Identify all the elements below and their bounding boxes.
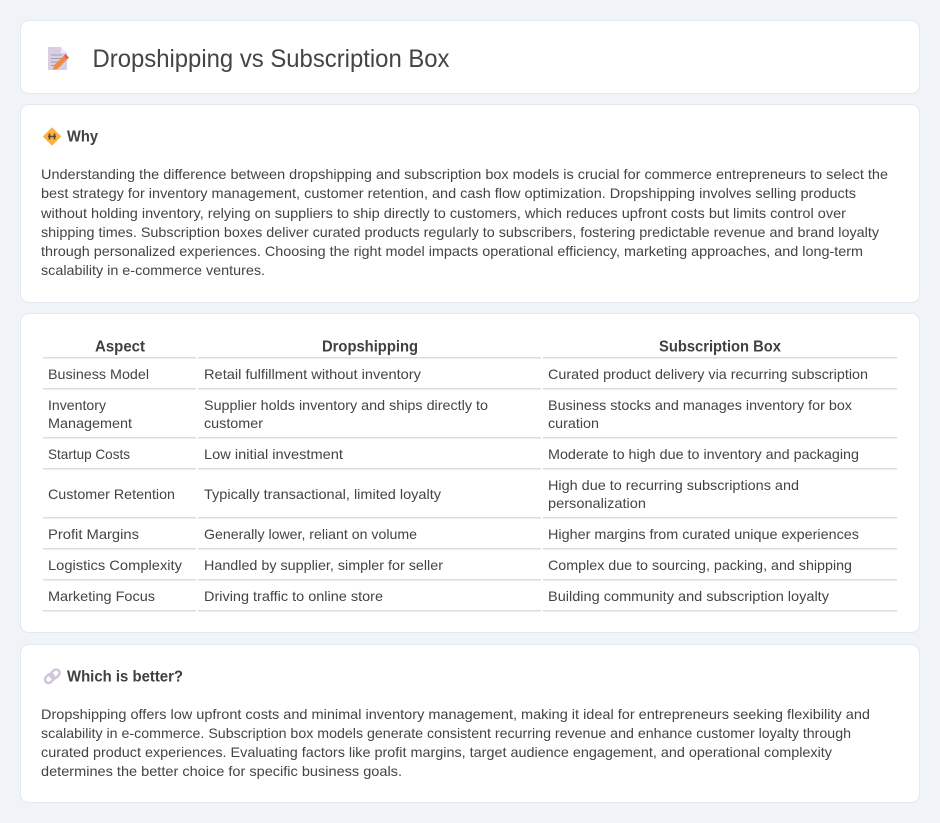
table header row: Aspect <box>95 338 146 356</box>
panel: comparison table <box>20 314 920 632</box>
table row: logistics complexity: Handled by supplier, simpler for seller <box>204 557 443 573</box>
table row: inventory management: Supplier holds inventory and ships directly to <box>204 397 488 413</box>
text block: why paragraph: Understanding the difference between dropshipping and subscription box models is crucial for commerce entrepreneurs to select the <box>41 166 888 182</box>
table row: startup costs: Low initial investment <box>204 446 343 462</box>
table header row: Subscription Box <box>659 338 781 356</box>
table row: marketing focus: Marketing Focus <box>48 588 155 604</box>
table header row: Dropshipping <box>322 338 418 356</box>
table row: profit margins <box>43 526 897 550</box>
table row: inventory management: Business stocks and manages inventory for box <box>548 397 852 413</box>
table row: startup costs: Startup Costs <box>48 446 130 462</box>
table row: inventory management: curation <box>548 415 599 431</box>
text block: why paragraph: shipping times. Subscription boxes deliver curated products regularly to subscribers, fostering predictable revenue and brand loyalty <box>41 224 879 240</box>
title: Dropshipping vs Subscription Box <box>92 45 450 73</box>
panel: why <box>20 104 920 302</box>
text block: which is better paragraph <box>41 706 870 779</box>
table row: customer retention: Typically transactional, limited loyalty <box>204 486 441 502</box>
table row: inventory management <box>43 397 897 438</box>
table row: business model <box>43 366 897 390</box>
table row: customer retention: High due to recurring subscriptions and <box>548 477 799 493</box>
table row: logistics complexity: Complex due to sourcing, packing, and shipping <box>548 557 852 573</box>
text block: which is better paragraph: determines the better choice for specific business goals. <box>41 763 402 779</box>
table row: business model: Business Model <box>48 366 149 382</box>
table row: inventory management: Management <box>48 415 132 431</box>
icon: orange diamond sign <box>44 128 60 145</box>
text block: why paragraph: without holding inventory, relying on suppliers to ship directly to customers, which reduces upfront costs but limits control over <box>40 205 846 221</box>
heading: which is better: Which is better? <box>67 668 183 686</box>
text block: why paragraph <box>40 166 888 278</box>
text block: which is better paragraph: scalability in e-commerce. Subscription box models generate consistent recurring revenue and enhance customer loyalty through <box>41 725 851 741</box>
table row: business model: Retail fulfillment without inventory <box>204 366 421 382</box>
table row: marketing focus: Building community and subscription loyalty <box>548 588 829 604</box>
table row: logistics complexity: Logistics Complexity <box>48 557 182 573</box>
text block: which is better paragraph: Dropshipping offers low upfront costs and minimal inventory management, making it ideal for entrepreneurs seeking flexibility and <box>41 706 870 722</box>
table row: logistics complexity <box>43 557 897 580</box>
table row: startup costs: Moderate to high due to inventory and packaging <box>548 446 859 462</box>
table row: customer retention: Customer Retention <box>48 486 175 502</box>
table row: marketing focus: Driving traffic to online store <box>204 588 383 604</box>
table row: inventory management: customer <box>204 415 263 431</box>
text block: why paragraph: best strategy for inventory management, customer retention, and cash flow optimization. Dropshipping involves selling products <box>41 185 856 201</box>
text block: which is better paragraph: curated product experiences. Evaluating factors like profit margins, target audience engagement, and operational complexity <box>41 744 832 760</box>
text block: why paragraph: scalability in e-commerce ventures. <box>41 262 265 278</box>
table row: profit margins: Higher margins from curated unique experiences <box>548 526 859 542</box>
icon: memo with pencil <box>48 47 69 70</box>
text block: why paragraph: through personalized experiences. Choosing the right model impacts operational efficiency, marketing approaches, and long-term <box>41 243 863 259</box>
heading: why: Why <box>67 128 98 146</box>
table header row <box>43 338 897 358</box>
table row: customer retention <box>43 477 897 518</box>
table row: startup costs <box>43 446 897 470</box>
table row: profit margins: Generally lower, reliant on volume <box>204 526 417 542</box>
table row: marketing focus <box>43 588 897 612</box>
table row: profit margins: Profit Margins <box>48 526 139 542</box>
table row: inventory management: Inventory <box>48 397 106 413</box>
icon: chain link <box>43 668 61 685</box>
table row: customer retention: personalization <box>548 495 646 511</box>
panel: which is better <box>20 644 920 802</box>
table row: business model: Curated product delivery via recurring subscription <box>548 366 868 382</box>
panel: header <box>20 20 920 94</box>
